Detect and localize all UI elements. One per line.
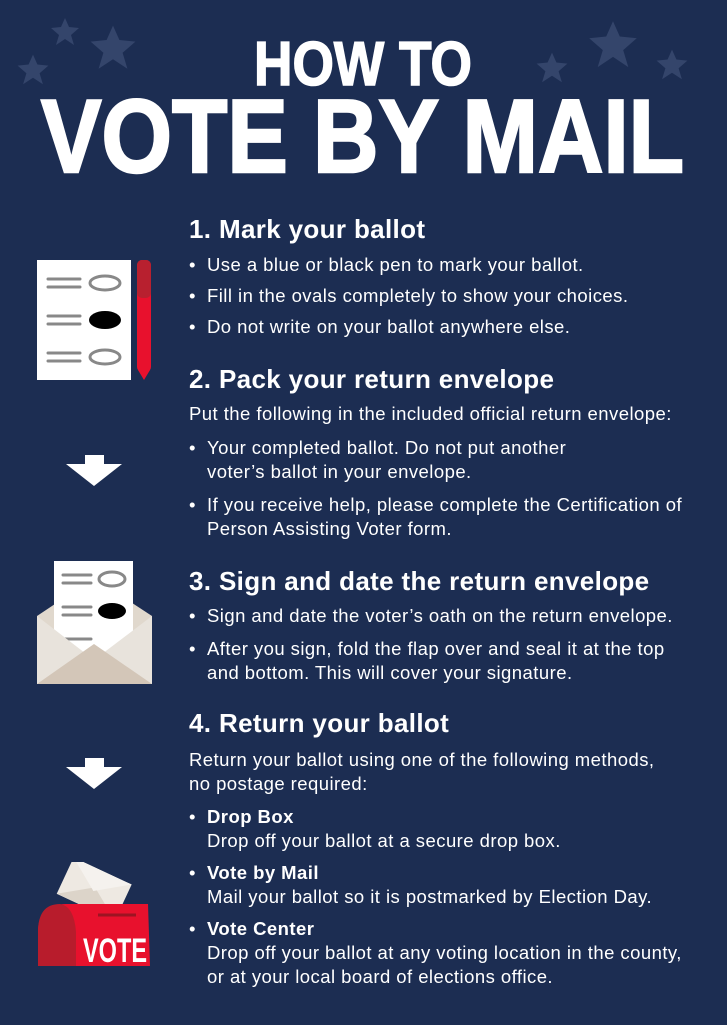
text: If you receive help, please complete the Certification of — [207, 494, 682, 515]
text: Your completed ballot. Do not put another — [207, 437, 566, 458]
icon: ballot and pen — [37, 260, 151, 380]
text: Drop off your ballot at a secure drop box. — [207, 830, 561, 851]
step 2 text — [189, 403, 682, 539]
title: HOW TO — [254, 30, 472, 99]
text: Use a blue or black pen to mark your ballot. — [207, 254, 584, 275]
step 1 bullets — [190, 254, 628, 337]
icon: mailbox — [38, 862, 150, 968]
icon: envelope with ballot — [37, 561, 152, 684]
text: Vote Center — [207, 918, 314, 939]
text: voter’s ballot in your envelope. — [207, 461, 472, 482]
text: and bottom. This will cover your signature. — [207, 662, 573, 683]
text: Drop Box — [207, 806, 294, 827]
text: Do not write on your ballot anywhere else. — [207, 316, 570, 337]
step 1 heading: 1. Mark your ballot — [189, 214, 425, 244]
text: Put the following in the included official return envelope: — [189, 403, 672, 424]
text: Return your ballot using one of the following methods, — [189, 749, 654, 770]
step 4 text — [189, 749, 682, 987]
step 4 heading: 4. Return your ballot — [189, 708, 449, 738]
text: Sign and date the voter’s oath on the return envelope. — [207, 605, 673, 626]
arrow 1 — [66, 455, 122, 486]
text: Drop off your ballot at any voting location in the county, — [207, 942, 682, 963]
step 3 heading: 3. Sign and date the return envelope — [189, 566, 649, 596]
text: no postage required: — [189, 773, 368, 794]
text: Person Assisting Voter form. — [207, 518, 452, 539]
step 3 bullets — [190, 605, 673, 683]
text: Mail your ballot so it is postmarked by Election Day. — [207, 886, 652, 907]
step 2 heading: 2. Pack your return envelope — [189, 364, 554, 394]
text: After you sign, fold the flap over and seal it at the top — [207, 638, 665, 659]
title — [40, 30, 684, 190]
arrow 2 — [66, 758, 122, 789]
text: Fill in the ovals completely to show your choices. — [207, 285, 628, 306]
text: or at your local board of elections office. — [207, 966, 553, 987]
background stars — [18, 18, 687, 84]
text: Vote by Mail — [207, 862, 319, 883]
